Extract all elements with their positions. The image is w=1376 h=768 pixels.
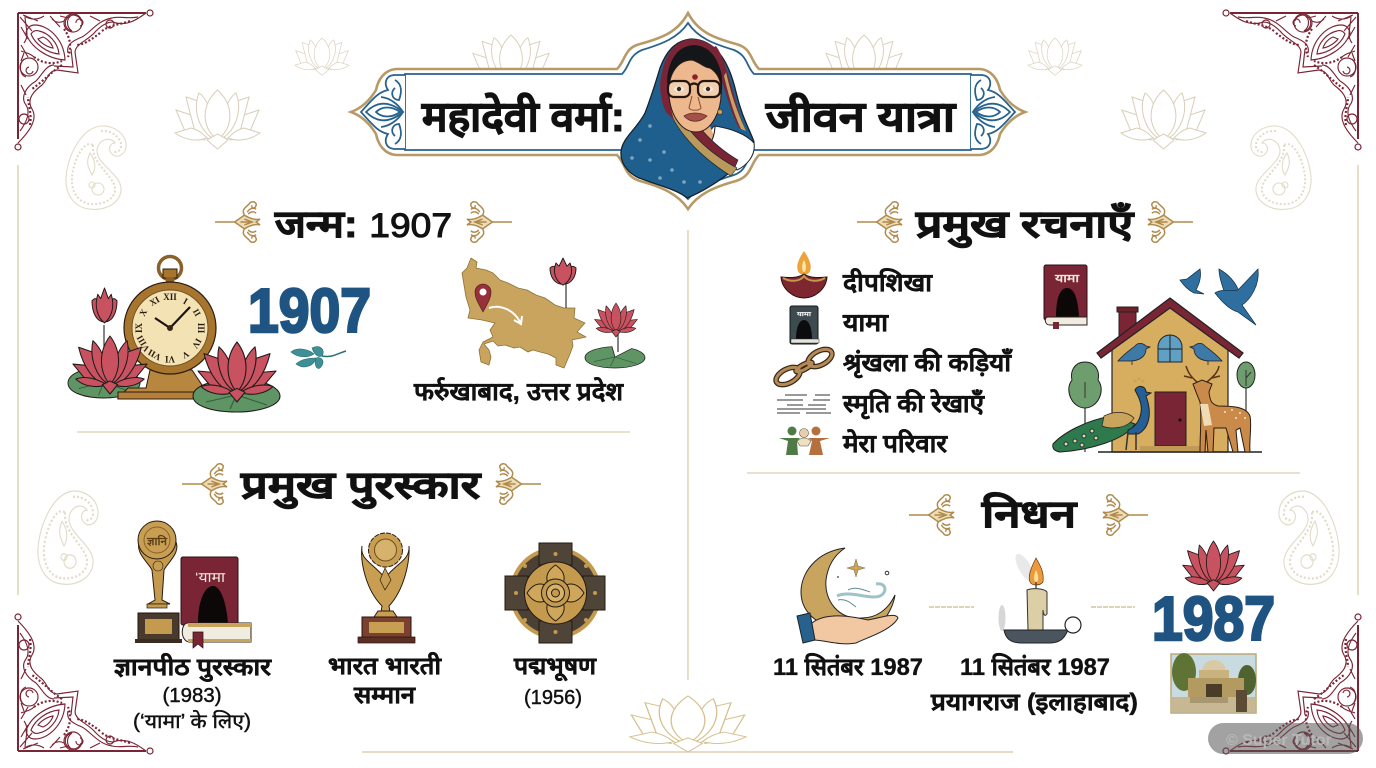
title text: महादेवी वर्मा: bbox=[421, 92, 625, 140]
work: deepshikha: दीपशिखा bbox=[842, 268, 934, 297]
portrait of Mahadevi Varma bbox=[621, 39, 754, 198]
death: candle: प्रयागराज (इलाहाबाद) bbox=[930, 689, 1138, 716]
list of works bbox=[773, 251, 1013, 458]
work: mera parivar bbox=[779, 426, 949, 458]
clock numerals: II bbox=[191, 307, 203, 318]
award: bharat bharati bbox=[328, 533, 442, 709]
heading: major works bbox=[857, 202, 1193, 248]
work: deepshikha bbox=[781, 251, 934, 298]
heading: awards bbox=[182, 464, 541, 509]
work: yama: यामा bbox=[842, 309, 890, 337]
icon: trophy with book bbox=[135, 521, 251, 648]
icon: bharat bharati trophy bbox=[358, 533, 415, 643]
photo: memorial bbox=[1171, 653, 1256, 713]
map of Uttar Pradesh bbox=[462, 258, 645, 368]
heading: awards: प्रमुख पुरस्कार bbox=[240, 465, 482, 509]
clock numerals: I bbox=[181, 296, 190, 307]
clock numerals: VII bbox=[146, 347, 163, 363]
small teal flower bbox=[291, 347, 346, 368]
background paisleys bbox=[38, 126, 1339, 584]
right banner cap motif bbox=[971, 75, 1015, 149]
illustration: clock with lotuses bbox=[68, 256, 280, 412]
icon: extinguishing candle bbox=[998, 551, 1081, 643]
clock numerals bbox=[134, 292, 206, 364]
icon: trophy with book: ‘यामा bbox=[195, 569, 225, 585]
heading: major works: प्रमुख रचनाएँ bbox=[915, 202, 1135, 248]
clock numerals: VIII bbox=[134, 333, 152, 353]
peacock bbox=[1053, 378, 1151, 452]
award: padma bhushan: (1956) bbox=[524, 687, 582, 709]
title banner frame bbox=[351, 13, 1025, 209]
clock numerals: IX bbox=[134, 323, 144, 333]
heading: death bbox=[909, 492, 1148, 536]
corner ornament: bottom right bbox=[1223, 614, 1361, 754]
award: jnanpith: (‘यामा’ के लिए) bbox=[133, 710, 251, 733]
illustration: house with animals bbox=[1053, 269, 1262, 452]
work: shrinkhala ki kadiyan bbox=[773, 346, 1013, 388]
corner ornament: bottom left bbox=[15, 614, 153, 754]
work: shrinkhala ki kadiyan: श्रृंखला की कड़ियाँ bbox=[843, 348, 1013, 379]
award: jnanpith bbox=[113, 521, 272, 733]
work: yama bbox=[790, 306, 890, 344]
clock numerals: V bbox=[180, 349, 191, 361]
award: padma bhushan bbox=[505, 543, 605, 709]
title text bbox=[421, 92, 957, 140]
watermark: © Super Tutor bbox=[1226, 732, 1332, 749]
book: yama maroon: यामा bbox=[1054, 273, 1080, 285]
death: moon and hand: 11 सितंबर 1987 bbox=[773, 653, 923, 681]
award: bharat bharati: भारत भारती bbox=[328, 652, 442, 680]
corner ornament: top left bbox=[15, 10, 153, 150]
clock numerals: X bbox=[137, 307, 149, 318]
left banner cap motif bbox=[361, 75, 405, 149]
death: candle bbox=[930, 551, 1138, 716]
dashed connectors bbox=[929, 606, 1135, 608]
icon: trophy with book: ज्ञानि bbox=[146, 534, 168, 548]
trees bbox=[1069, 362, 1255, 452]
death: moon and hand bbox=[773, 548, 923, 681]
death: lotus and year: 1987 bbox=[1152, 585, 1275, 654]
award: jnanpith: ज्ञानपीठ पुरस्कार bbox=[113, 653, 272, 682]
watermark bbox=[1208, 723, 1363, 754]
clock numerals: IV bbox=[190, 337, 204, 351]
heading: death: निधन bbox=[981, 492, 1078, 536]
clock numerals: XI bbox=[148, 294, 162, 308]
clock numerals: III bbox=[196, 323, 206, 334]
death: lotus and year bbox=[1152, 541, 1275, 654]
heading: birth bbox=[215, 202, 512, 246]
award: bharat bharati: सम्मान bbox=[353, 682, 417, 709]
wall birds bbox=[1118, 343, 1222, 365]
work: mera parivar: मेरा परिवार bbox=[842, 429, 949, 458]
birthplace label: फर्रुखाबाद, उत्तर प्रदेश bbox=[413, 377, 624, 406]
work: yama: यामा bbox=[796, 312, 812, 318]
flying birds bbox=[1180, 269, 1258, 325]
deer bbox=[1184, 366, 1251, 452]
background lotuses bbox=[175, 35, 1206, 752]
big year 1907: 1907 bbox=[248, 277, 371, 346]
death: candle: 11 सितंबर 1987 bbox=[960, 653, 1110, 681]
icon: crescent and hand bbox=[797, 548, 898, 644]
icon: padma bhushan medal bbox=[505, 543, 605, 643]
book: yama maroon bbox=[1044, 265, 1087, 329]
work: smriti ki rekhayen: स्मृति की रेखाएँ bbox=[842, 389, 985, 420]
clock numerals: VI bbox=[165, 354, 175, 364]
corner ornament: top right bbox=[1223, 10, 1361, 150]
clock numerals: XII bbox=[163, 292, 177, 302]
award: padma bhushan: पद्मभूषण bbox=[513, 653, 598, 682]
title text: जीवन यात्रा bbox=[765, 92, 957, 140]
work: smriti ki rekhayen bbox=[777, 389, 985, 420]
heading: birth: जन्म: 1907 bbox=[274, 204, 452, 246]
award: jnanpith: (1983) bbox=[162, 685, 222, 707]
